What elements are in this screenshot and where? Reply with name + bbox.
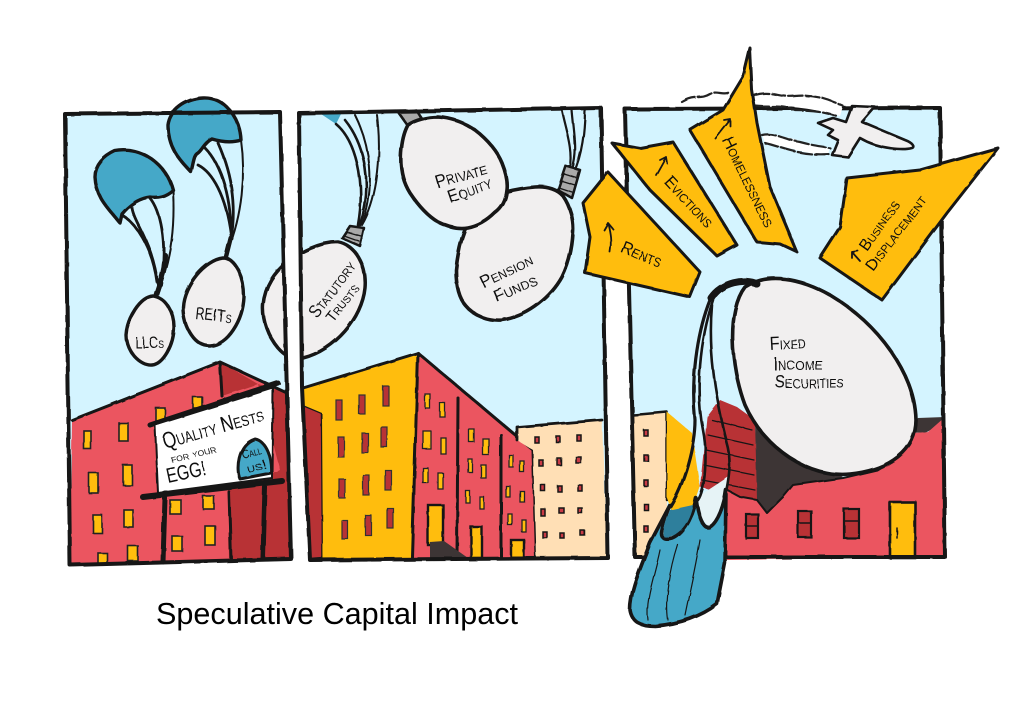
egg: pension funds with parachute strings: Funds	[490, 270, 540, 306]
callout: homelessness: Homelessness	[718, 133, 778, 230]
egg: statutory trusts, left half	[260, 264, 284, 356]
billboard: Quality Nests for your Egg: EGG!	[164, 457, 208, 488]
parachute egg: REITs: REITs	[195, 304, 232, 327]
building: yellow apartment block	[303, 353, 418, 560]
callout: business displacement: Business	[856, 197, 904, 254]
icon: teal call us egg: Call	[240, 442, 263, 462]
callout: rents: Rents	[619, 237, 665, 272]
callout: business displacement: Displacement	[863, 192, 931, 274]
egg: fixed income securities: Income	[773, 354, 823, 374]
title: Speculative Capital Impact	[156, 596, 518, 631]
parachute egg: REITs	[168, 98, 244, 346]
egg: statutory trusts with parachute strings: Statutory	[305, 257, 360, 321]
building: broken red wall with windows and door	[727, 417, 945, 560]
egg: fixed income securities	[733, 278, 916, 474]
billboard: Quality Nests for your Egg: for your	[169, 441, 218, 466]
parachute egg: LLCs: LLCs	[135, 335, 164, 352]
panel: egg crashing into neighbourhood	[625, 108, 945, 560]
billboard: Quality Nests for your Egg	[143, 383, 282, 562]
egg: statutory trusts with parachute strings: Trusts	[323, 280, 363, 325]
contrail: airplane smoke trails	[682, 92, 843, 154]
icon: airplane	[818, 106, 913, 157]
building: beige tower remnant	[633, 412, 667, 556]
callout: evictions: Evictions	[660, 172, 718, 232]
frame: panel 2 outline	[299, 108, 608, 560]
frame: panel 1 outline	[65, 112, 291, 565]
building: red apartment block	[70, 362, 291, 565]
building: red apartment block with doors	[412, 353, 536, 560]
egg: pension funds with parachute strings	[456, 110, 585, 320]
callout: business displacement	[820, 148, 998, 300]
icon: teal call us egg: us!	[245, 456, 268, 476]
callout: evictions	[612, 142, 737, 256]
building: beige tower	[517, 420, 607, 558]
wreck: exposed dark red interior	[700, 400, 758, 505]
wreck: dark brown hole	[755, 420, 843, 513]
egg: private equity: Private	[433, 158, 489, 192]
callout: rents	[583, 172, 700, 297]
callout: homelessness	[690, 48, 797, 252]
egg: statutory trusts with parachute strings	[302, 114, 380, 360]
icon: teal call us egg	[238, 439, 271, 479]
building: yellow wall	[667, 412, 700, 512]
panel: city street with statutory trusts, private equity and pension funds	[263, 108, 608, 560]
panel: billboard street with LLCs and REITs	[62, 96, 294, 567]
frame: panel 3 outline	[625, 108, 945, 557]
egg: pension funds with parachute strings: Pension	[477, 250, 536, 292]
building: dark red side wall	[303, 405, 323, 559]
egg: private equity: Equity	[445, 173, 495, 207]
egg: private equity	[398, 110, 507, 229]
billboard: Quality Nests for your Egg: Quality Nests	[159, 401, 266, 454]
bag: blue plastic bag parachute with straps	[630, 281, 757, 626]
egg: fixed income securities: Fixed	[769, 332, 806, 355]
parachute egg: LLCs	[95, 150, 174, 365]
egg: fixed income securities: Securities	[775, 372, 844, 392]
